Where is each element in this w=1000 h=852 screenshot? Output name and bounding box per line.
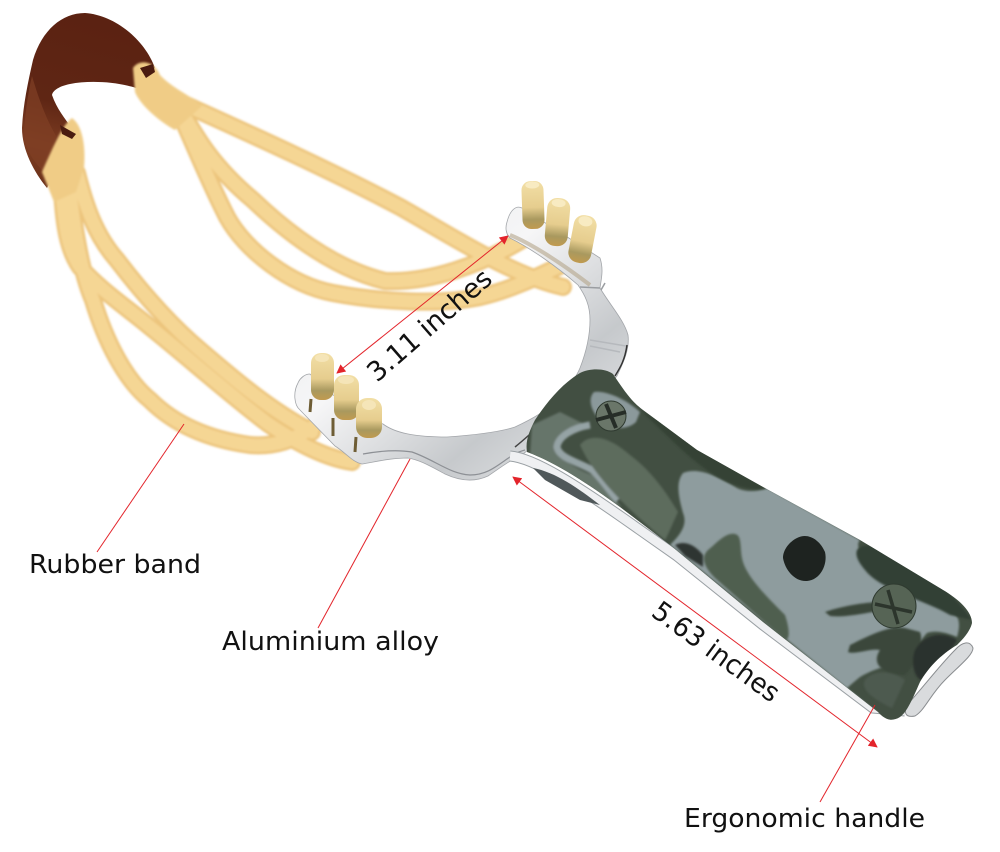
label: 5.63 inches: 5.63 inches	[646, 596, 785, 709]
leader line: ergonomic handle	[820, 705, 875, 802]
label: 3.11 inches: 3.11 inches	[361, 263, 499, 388]
label: aluminium alloy: Aluminium alloy	[222, 627, 439, 657]
dark camouflage patches	[640, 410, 972, 708]
leather slot ends	[60, 64, 155, 139]
lower prong pegs	[311, 353, 382, 438]
leather pouch	[22, 13, 155, 188]
upper rubber band bundle	[133, 62, 568, 302]
end plate	[905, 643, 973, 716]
label: rubber band: Rubber band	[29, 550, 201, 580]
leader line: rubber band	[97, 424, 184, 552]
leader line: aluminium alloy	[318, 459, 410, 628]
upper screw	[596, 401, 626, 431]
rubber band tubes	[42, 62, 568, 462]
arrow: 5.63 inches dimension	[513, 477, 877, 747]
arrow: 3.11 inches dimension	[337, 236, 508, 373]
lower rubber band bundle	[42, 118, 352, 462]
handle body	[527, 369, 972, 720]
label: ergonomic handle: Ergonomic handle	[684, 804, 925, 834]
ergonomic camouflage handle	[510, 369, 973, 720]
handle silver side strip	[510, 456, 905, 711]
black spot	[783, 536, 826, 581]
lower screw	[872, 584, 916, 628]
aluminium alloy frame	[295, 207, 628, 480]
upper prong pegs	[521, 181, 598, 265]
light camouflage patches	[530, 392, 959, 715]
